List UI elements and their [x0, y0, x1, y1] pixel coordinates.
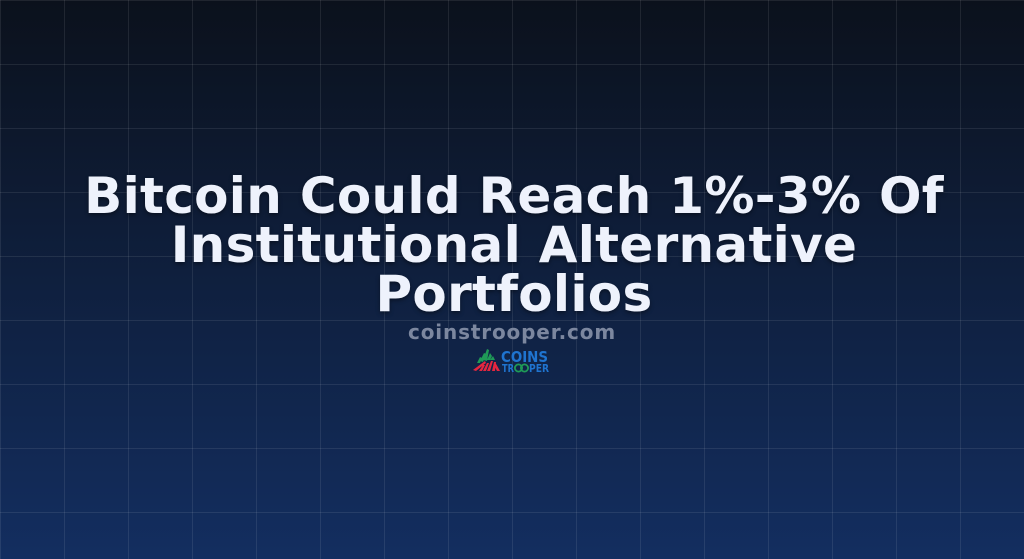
logo wordmark: TROOPER: TR [502, 363, 514, 375]
icon: red base strokes [473, 361, 500, 371]
title [84, 167, 944, 323]
title: Institutional Alternative [171, 216, 857, 274]
title: Portfolios [375, 265, 653, 323]
title: Bitcoin Could Reach 1%-3% Of [84, 167, 944, 225]
logo wordmark: TROOPER [502, 363, 549, 375]
icon: green rising bars [477, 349, 495, 363]
source site name: coinstrooper.com [408, 320, 616, 344]
logo wordmark: COINS: COINS [501, 348, 548, 366]
icon: CoinsTrooper logo [473, 348, 549, 375]
logo wordmark: TROOPER: PER [529, 363, 549, 375]
